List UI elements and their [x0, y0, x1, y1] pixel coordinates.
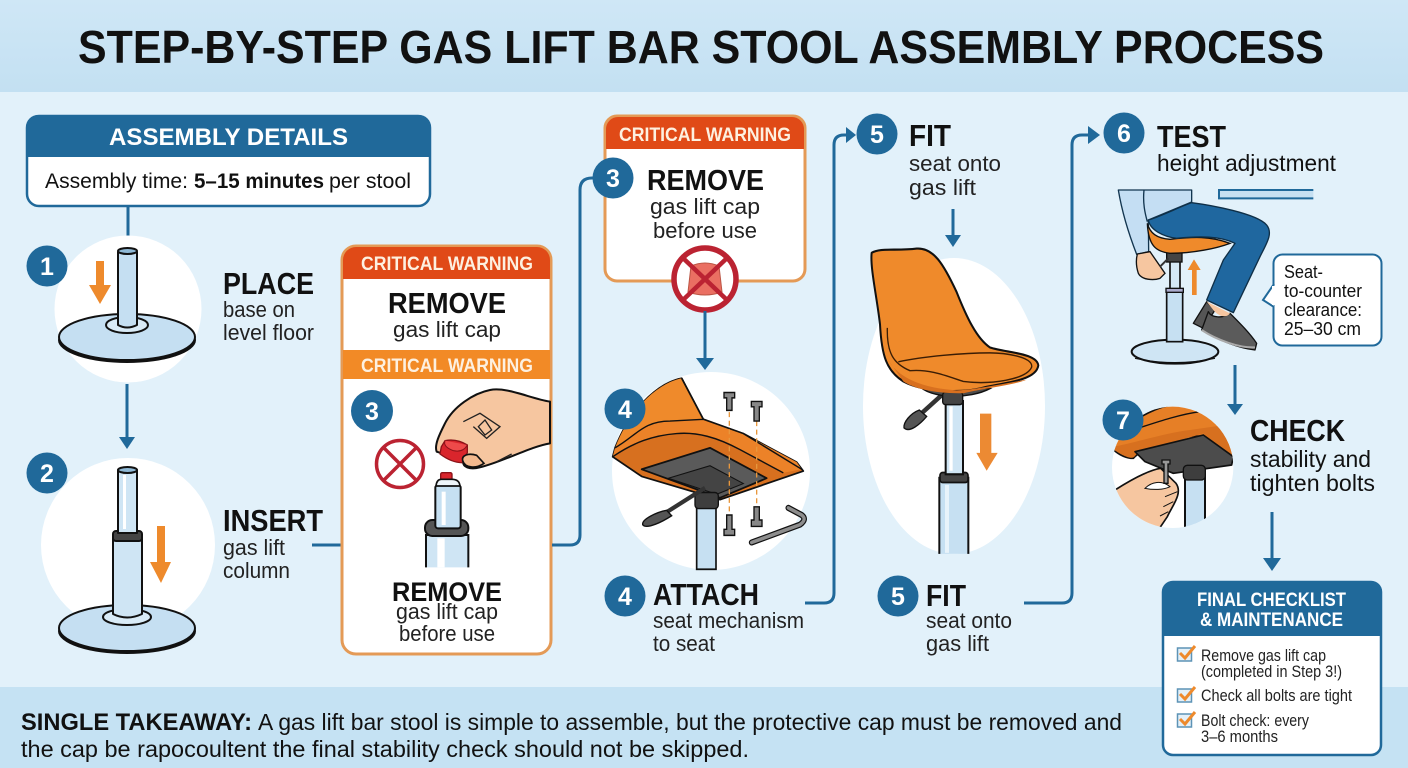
step 7 label: tighten bolts: [1250, 470, 1375, 496]
warning heading 1: CRITICAL WARNING: [361, 253, 533, 275]
step 2 badge: [26, 452, 68, 494]
step 1 label: PLACE: [223, 267, 314, 301]
title band: [0, 0, 1408, 92]
step 4 upper badge: [604, 388, 646, 430]
remove text: REMOVE: [647, 165, 764, 197]
remove caption: before use: [399, 621, 495, 646]
step 7 illustration: tightening bolts: [1110, 403, 1237, 530]
step 7 label: stability and: [1250, 446, 1371, 472]
checklist heading: FINAL CHECKLIST: [1197, 590, 1346, 611]
step 5 upper label: seat onto: [909, 151, 1001, 176]
checklist item 3: Bolt check: every: [1201, 712, 1310, 730]
callout: seat-to-counter clearance: clearance:: [1284, 300, 1362, 320]
step 4 label: to seat: [653, 631, 716, 656]
step 2 label: INSERT: [223, 504, 323, 538]
prohibition icon: cap: [674, 248, 736, 310]
remove text: before use: [653, 218, 757, 243]
connector: step 4 to 5: [805, 127, 856, 603]
step 2 label: column: [223, 558, 290, 583]
checklist heading: [1197, 590, 1346, 631]
assembly time text: per stool: [329, 170, 411, 193]
step 3 badge: [351, 390, 393, 432]
callout: seat-to-counter clearance: 25–30 cm: [1284, 319, 1361, 339]
step 5 lower label: [926, 579, 1012, 656]
step 4 lower badge: 4: [618, 583, 632, 611]
step 2 badge: 2: [40, 460, 54, 488]
step 4 label: ATTACH: [653, 578, 759, 612]
panel: critical warning card with step 3: [342, 246, 551, 654]
step 1 label: [223, 267, 314, 345]
arrow: step 6 to 7: [1227, 365, 1243, 415]
step 6 label: [1157, 120, 1337, 176]
takeaway sentence line 2: the cap be rapocoultent the final stability check should not be skipped.: [21, 736, 749, 762]
step 3 badge: [592, 158, 634, 198]
checklist item 1: Remove gas lift cap: [1201, 647, 1326, 665]
step 7 badge: 7: [1116, 407, 1130, 435]
step 1 badge: [26, 246, 68, 286]
step 2 label: gas lift: [223, 535, 286, 560]
step 3 badge: 3: [365, 398, 379, 426]
step 4 upper badge: 4: [618, 396, 632, 424]
assembly details heading: ASSEMBLY DETAILS: [109, 124, 348, 151]
assembly time text: [45, 170, 411, 193]
step 5 upper label: [909, 119, 1001, 200]
title: STEP-BY-STEP GAS LIFT BAR STOOL ASSEMBLY PROCESS: [78, 21, 1324, 73]
step 1 label: base on: [223, 297, 295, 322]
step 5 upper label: FIT: [909, 119, 951, 153]
remove text: gas lift cap: [393, 317, 501, 342]
panel: assembly details: [26, 115, 431, 206]
step 6 badge: 6: [1117, 120, 1131, 148]
step 7 label: [1250, 414, 1375, 496]
panel: critical warning card 2: [605, 116, 805, 310]
arrow: into chair: [945, 209, 961, 247]
step 5 lower label: FIT: [926, 579, 966, 613]
step 5 lower label: seat onto: [926, 608, 1012, 633]
warning heading 2: CRITICAL WARNING: [361, 355, 533, 377]
checklist item 1: [1178, 646, 1342, 681]
step 5 lower badge: 5: [891, 583, 905, 611]
assembly time text: 5–15 minutes: [194, 170, 324, 193]
counter edge: [1219, 190, 1313, 198]
step 5 upper label: gas lift: [909, 175, 977, 200]
step 5 upper badge: [856, 114, 898, 154]
step 1 illustration: base: [54, 236, 202, 382]
connector: details to step 1: [126, 207, 130, 236]
connector: step 5 to 6: [1024, 126, 1100, 603]
step 4 illustration: seat mechanism: [612, 372, 810, 570]
step 5 upper badge: 5: [870, 121, 884, 149]
connector: step 2 to warning card: [312, 544, 342, 546]
step 5 illustration: chair on gas lift: [863, 249, 1045, 554]
panel: final checklist and maintenance: [1162, 582, 1382, 755]
takeaway label: SINGLE TAKEAWAY:: [21, 709, 252, 736]
checklist item 1: (completed in Step 3!): [1201, 663, 1342, 681]
step 6 label: TEST: [1157, 120, 1226, 154]
step 4 label: [653, 578, 804, 656]
step 6 illustration: seated person testing height: [1118, 190, 1313, 364]
warning heading: CRITICAL WARNING: [619, 124, 791, 146]
checklist heading: & MAINTENANCE: [1200, 610, 1343, 631]
step 5 lower badge: [878, 576, 918, 616]
step 5 lower label: gas lift: [926, 631, 990, 656]
callout: seat-to-counter clearance: Seat-: [1284, 262, 1323, 282]
remove caption: gas lift cap: [396, 599, 498, 624]
icon: gas lift with cap: [425, 473, 468, 567]
arrow: step 1 to 2: [119, 384, 135, 449]
step 6 label: height adjustment: [1157, 150, 1337, 176]
step 7 label: CHECK: [1250, 414, 1345, 448]
step 4 lower badge: [604, 576, 646, 616]
step 1 badge: 1: [40, 253, 54, 281]
checklist item 2: Check all bolts are tight: [1201, 687, 1352, 705]
remove text: gas lift cap: [650, 194, 760, 219]
assembly time text: Assembly time:: [45, 170, 188, 193]
remove caption: [392, 577, 502, 646]
remove text: REMOVE: [388, 288, 506, 320]
remove caption: REMOVE: [392, 577, 502, 607]
step 2 illustration: gas lift: [41, 458, 215, 654]
remove text: [647, 165, 764, 243]
takeaway sentence line 1: A gas lift bar stool is simple to assemble, but the protective cap must be removed and: [258, 709, 1122, 735]
step 6 badge: [1104, 112, 1144, 154]
remove text: [388, 288, 506, 342]
step 2 label: [223, 504, 323, 583]
callout: seat-to-counter clearance: [1263, 254, 1382, 346]
prohibition icon: [376, 440, 424, 488]
arrow: warning to step 4: [696, 311, 714, 370]
step 4 label: seat mechanism: [653, 608, 804, 633]
step 7 badge: [1102, 400, 1144, 440]
icon: hand removing cap: [436, 389, 550, 468]
arrow: step 7 to checklist: [1263, 512, 1281, 571]
footer band: single takeaway: [0, 687, 1408, 768]
step 1 label: level floor: [223, 320, 314, 345]
connector: warning card to card 2: [552, 178, 600, 545]
step 3 badge: 3: [606, 165, 620, 193]
checklist item 3: [1178, 712, 1310, 746]
callout: seat-to-counter clearance: to-counter: [1284, 281, 1362, 301]
checklist item 3: 3–6 months: [1201, 728, 1278, 746]
